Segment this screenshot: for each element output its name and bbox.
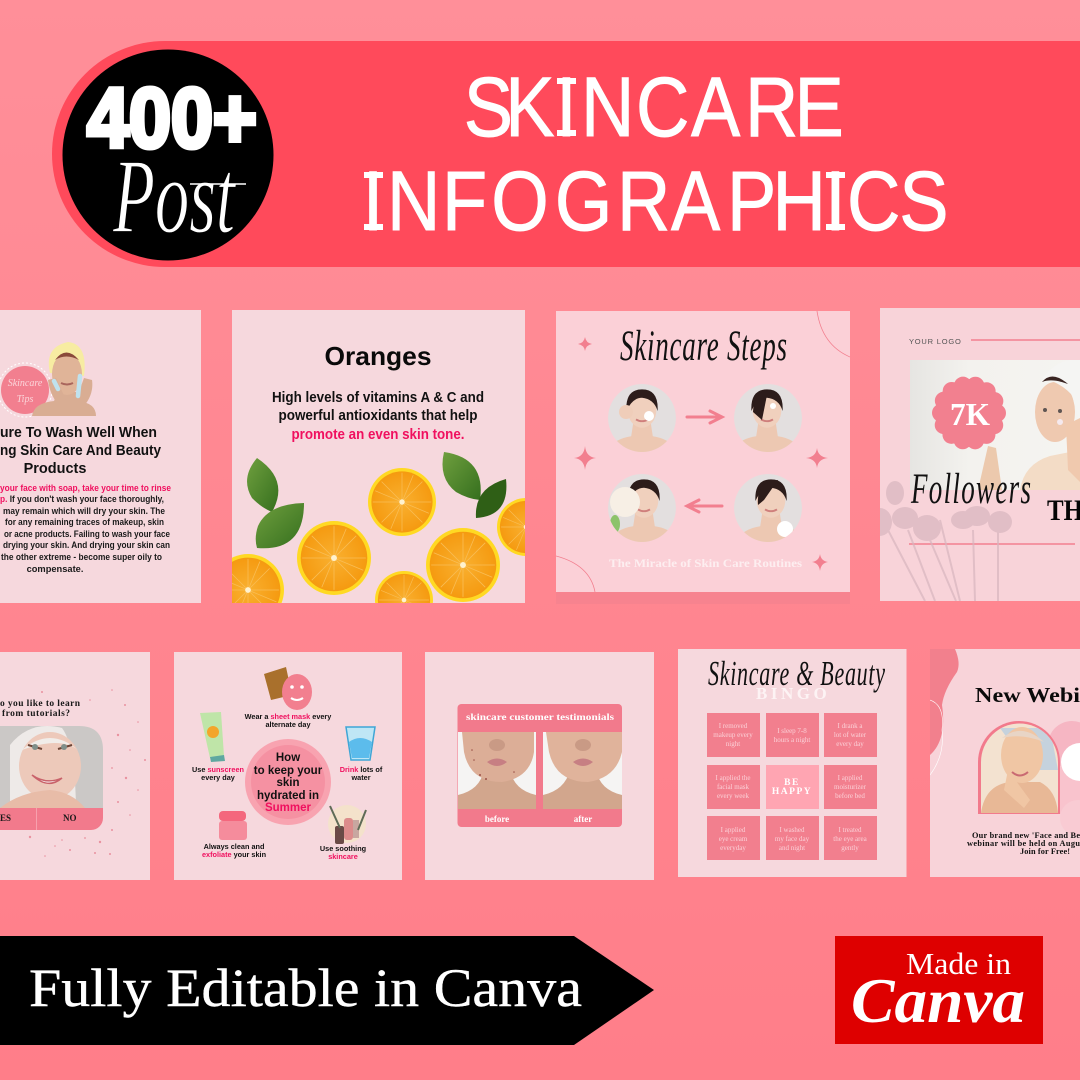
bingo grid: every week xyxy=(717,792,750,800)
caption: sunscreen: every day xyxy=(201,773,236,782)
heading: Products xyxy=(24,461,86,477)
bingo grid: the eye area xyxy=(833,835,868,843)
badge: made in canva xyxy=(835,936,1043,1044)
bingo grid: eye cream xyxy=(719,835,748,843)
badge: 400+ Post xyxy=(62,50,274,260)
card xyxy=(458,704,622,827)
text: Join for Free! xyxy=(1020,847,1070,856)
text: webinar will be held on Augu xyxy=(967,839,1080,848)
text block: High levels of vitamins A & C and xyxy=(272,390,484,406)
heading xyxy=(0,425,161,477)
central circle: How xyxy=(276,752,300,764)
bingo grid: facial mask xyxy=(717,783,750,791)
bingo grid: I applied xyxy=(721,826,746,834)
badge: 400+ Post: 400+ xyxy=(87,71,257,165)
panel: hydrated in summer xyxy=(174,652,402,880)
icon: plant shadows xyxy=(868,481,1012,601)
bingo grid: gently xyxy=(841,844,859,852)
bingo grid: I treated xyxy=(838,826,862,834)
caption: exfoliate: exfoliate your skin xyxy=(202,850,266,859)
bingo grid: I applied xyxy=(838,774,863,782)
label: before: before xyxy=(485,814,509,824)
text block: powerful antioxidants that help xyxy=(278,408,478,424)
icon: sheet mask xyxy=(264,667,312,710)
bingo grid: I removed xyxy=(719,722,748,730)
central circle xyxy=(245,739,331,825)
central circle: hydrated in xyxy=(257,790,319,802)
body text: compensate. xyxy=(27,564,83,574)
body text: the other extreme - become super oily to xyxy=(1,552,162,562)
heading: followers: Followers xyxy=(910,465,1031,513)
arrow: left xyxy=(687,500,722,512)
icon: skincare tips badge xyxy=(0,363,52,417)
title: Skincare Infographics: SKINCARE xyxy=(464,60,844,154)
text xyxy=(0,699,81,719)
badge: 400+ Post: Post xyxy=(112,138,236,255)
photo: step 2 xyxy=(734,384,802,452)
bingo grid: I drank a xyxy=(838,722,863,730)
poll buttons: NO xyxy=(63,813,76,823)
title: Skincare Infographics xyxy=(363,60,949,248)
icon: sunscreen tube xyxy=(200,712,225,762)
text block xyxy=(272,390,484,443)
photo: step 1 xyxy=(608,384,676,452)
panel: wash well xyxy=(0,310,201,603)
photo in arch xyxy=(978,721,1060,814)
arrow: right xyxy=(687,411,722,423)
caption: exfoliate xyxy=(202,842,266,859)
caption: The Miracle of Skin Care Routines xyxy=(609,558,803,570)
text: o you like to learn xyxy=(0,699,81,709)
heading: Oranges xyxy=(324,341,432,371)
text xyxy=(967,832,1080,854)
caption: sunscreen xyxy=(192,765,244,782)
bingo grid: HAPPY xyxy=(772,787,812,797)
icon: cream jar xyxy=(219,811,247,840)
bingo grid: I sleep 7-8 xyxy=(777,727,807,735)
badge: made in canva: Made in xyxy=(906,946,1012,981)
label: after: after xyxy=(574,814,592,824)
bingo grid: makeup every xyxy=(713,731,753,739)
icon: sparkles xyxy=(574,337,828,571)
bingo word: BINGO xyxy=(756,684,830,703)
title: Skincare Infographics: INFOGRAPHICS xyxy=(363,154,949,248)
central circle: to keep your xyxy=(254,765,323,777)
body text: for any remaining traces of makeup, skin xyxy=(5,517,164,527)
body text: p. If you don't wash your face thoroughly, xyxy=(0,494,164,504)
arrow banner: Fully Editable in Canva xyxy=(29,958,582,1018)
badge: 7K xyxy=(935,379,1003,447)
text block: promote an even skin tone. xyxy=(292,427,464,443)
text: Our brand new 'Face and Be xyxy=(972,831,1080,840)
title banner xyxy=(52,41,1080,267)
central circle: skin xyxy=(276,777,300,789)
panel: bingo xyxy=(678,649,906,877)
caption: water xyxy=(340,765,383,782)
caption: soothing xyxy=(320,844,366,861)
badge: 7K: 7K xyxy=(950,396,990,432)
caption: soothing: skincare xyxy=(328,852,358,861)
caption: water: water xyxy=(350,773,371,782)
heading: New Webi xyxy=(975,683,1080,707)
arrow banner xyxy=(0,936,654,1045)
bingo grid: night xyxy=(726,740,740,748)
icon: speckles xyxy=(29,689,146,857)
body text: may remain which will dry your skin. The xyxy=(3,506,165,516)
photo: before xyxy=(458,732,536,809)
caption: alternate day: alternate day xyxy=(265,720,311,729)
caption: exfoliate: Always clean and xyxy=(204,842,264,851)
card title: skincare customer testimonials xyxy=(466,712,615,722)
icon: woman washing face xyxy=(32,342,96,416)
icon: floral background xyxy=(1050,721,1080,814)
bingo grid: everyday xyxy=(720,844,746,852)
heading: Skincare & Beauty xyxy=(708,655,886,693)
bingo grid: moisturizer xyxy=(834,783,867,791)
photo xyxy=(0,726,103,808)
panel: tutorials poll xyxy=(0,652,150,880)
photo xyxy=(910,360,1080,490)
bingo grid: before bed xyxy=(835,792,865,800)
body text: or acne products. Failing to wash your face xyxy=(4,529,170,539)
caption: sheet mask: Wear a sheet mask every xyxy=(245,712,332,721)
panel: new webinar xyxy=(930,649,1080,877)
bingo grid: my face day xyxy=(775,835,810,843)
body text: drying your skin. And drying your skin can xyxy=(3,540,170,550)
caption: soothing: Use soothing xyxy=(320,844,366,853)
bingo grid: and night xyxy=(779,844,805,852)
poll buttons: ES xyxy=(0,813,11,823)
central circle: Summer xyxy=(265,802,312,814)
icon: skincare tips badge: Tips xyxy=(17,394,33,405)
caption: sunscreen: Use sunscreen xyxy=(192,765,244,774)
body text: your face with soap, take your time to rinse xyxy=(0,483,171,493)
badge: made in canva: Canva xyxy=(851,965,1025,1036)
bingo grid: hours a night xyxy=(774,736,810,744)
icon: skincare bottles xyxy=(328,805,366,844)
bingo grid: every day xyxy=(836,740,864,748)
icon: skincare tips badge: Skincare xyxy=(8,378,43,389)
heading: ure To Wash Well When xyxy=(0,425,157,441)
bingo grid xyxy=(707,713,877,860)
icon: orange slices and leaves xyxy=(232,452,525,603)
logo text: YOUR LOGO xyxy=(909,337,962,346)
panel: testimonials xyxy=(425,652,654,880)
text: from tutorials? xyxy=(2,709,70,719)
bingo grid: I washed xyxy=(779,826,805,834)
photo: after xyxy=(543,732,622,809)
bingo grid: I applied the xyxy=(716,774,750,782)
blob xyxy=(930,649,959,755)
bingo grid: BE xyxy=(784,778,800,788)
body text xyxy=(0,483,171,574)
photo: step 4 xyxy=(734,474,802,542)
photo: step 3 xyxy=(608,474,676,542)
icon: glass of water xyxy=(346,727,375,760)
caption: water: Drink lots of xyxy=(340,765,383,774)
heading: ng Skin Care And Beauty xyxy=(0,443,161,459)
poll buttons xyxy=(0,808,103,830)
heading: Skincare Steps xyxy=(620,322,787,370)
panel: skincare steps xyxy=(556,311,850,604)
bingo grid: lot of water xyxy=(834,731,867,739)
panel: 7K followers xyxy=(868,308,1080,601)
panel: oranges xyxy=(232,310,525,603)
